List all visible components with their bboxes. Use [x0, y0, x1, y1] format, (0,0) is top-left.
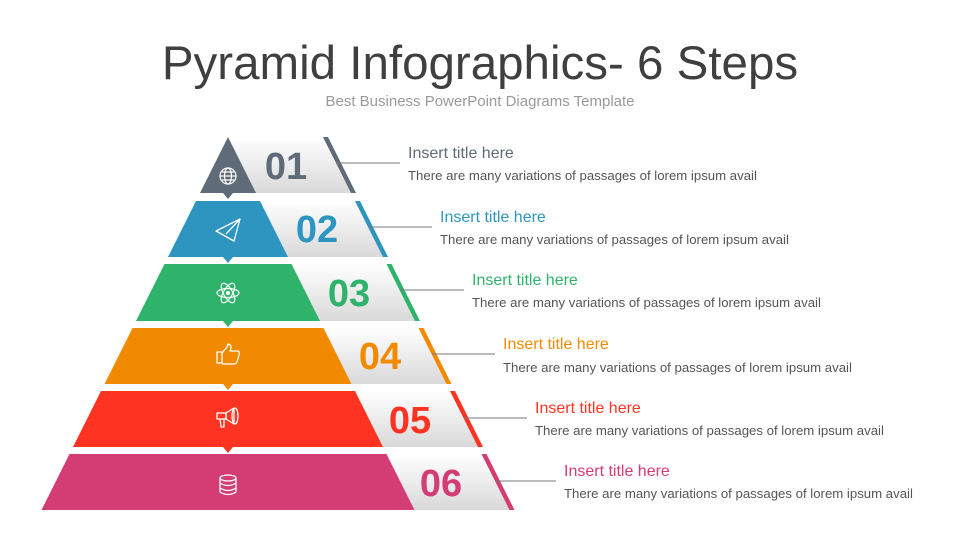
- tier 4: There are many variations of passages of lorem ipsum avail: [503, 360, 852, 375]
- tier 5: [73, 391, 884, 453]
- icon: atom: [217, 281, 239, 305]
- tier 2: [168, 201, 789, 263]
- tier 4: Insert title here: [503, 336, 609, 353]
- title: Pyramid Infographics- 6 Steps: [162, 37, 798, 90]
- tier 1: 01: [265, 146, 307, 188]
- tier 1: Insert title here: [408, 145, 514, 162]
- tier 4: [104, 328, 852, 390]
- tier 2: There are many variations of passages of lorem ipsum avail: [440, 232, 789, 247]
- subtitle: Best Business PowerPoint Diagrams Template: [325, 93, 635, 110]
- tier 6: Insert title here: [564, 463, 670, 480]
- tier 2: Insert title here: [440, 209, 546, 226]
- tier 2: 02: [296, 209, 338, 251]
- tier 6: 06: [420, 463, 462, 505]
- tier 1: There are many variations of passages of lorem ipsum avail: [408, 168, 757, 183]
- tier 3: 03: [328, 273, 370, 315]
- tier 6: [42, 454, 913, 510]
- tier 3: There are many variations of passages of lorem ipsum avail: [472, 295, 821, 310]
- tier 5: There are many variations of passages of lorem ipsum avail: [535, 423, 884, 438]
- tier 3: Insert title here: [472, 272, 578, 289]
- tier 5: Insert title here: [535, 400, 641, 417]
- icon: thumbs up: [217, 344, 239, 364]
- tier 4: 04: [359, 336, 401, 378]
- tier 6: There are many variations of passages of lorem ipsum avail: [564, 486, 913, 501]
- icon: paper plane: [216, 219, 240, 241]
- tier 3: [136, 264, 821, 327]
- tier 5: 05: [389, 400, 431, 442]
- icon: globe: [220, 168, 236, 184]
- tier 1: [200, 137, 757, 199]
- icon: database: [220, 475, 236, 494]
- icon: megaphone: [217, 408, 238, 427]
